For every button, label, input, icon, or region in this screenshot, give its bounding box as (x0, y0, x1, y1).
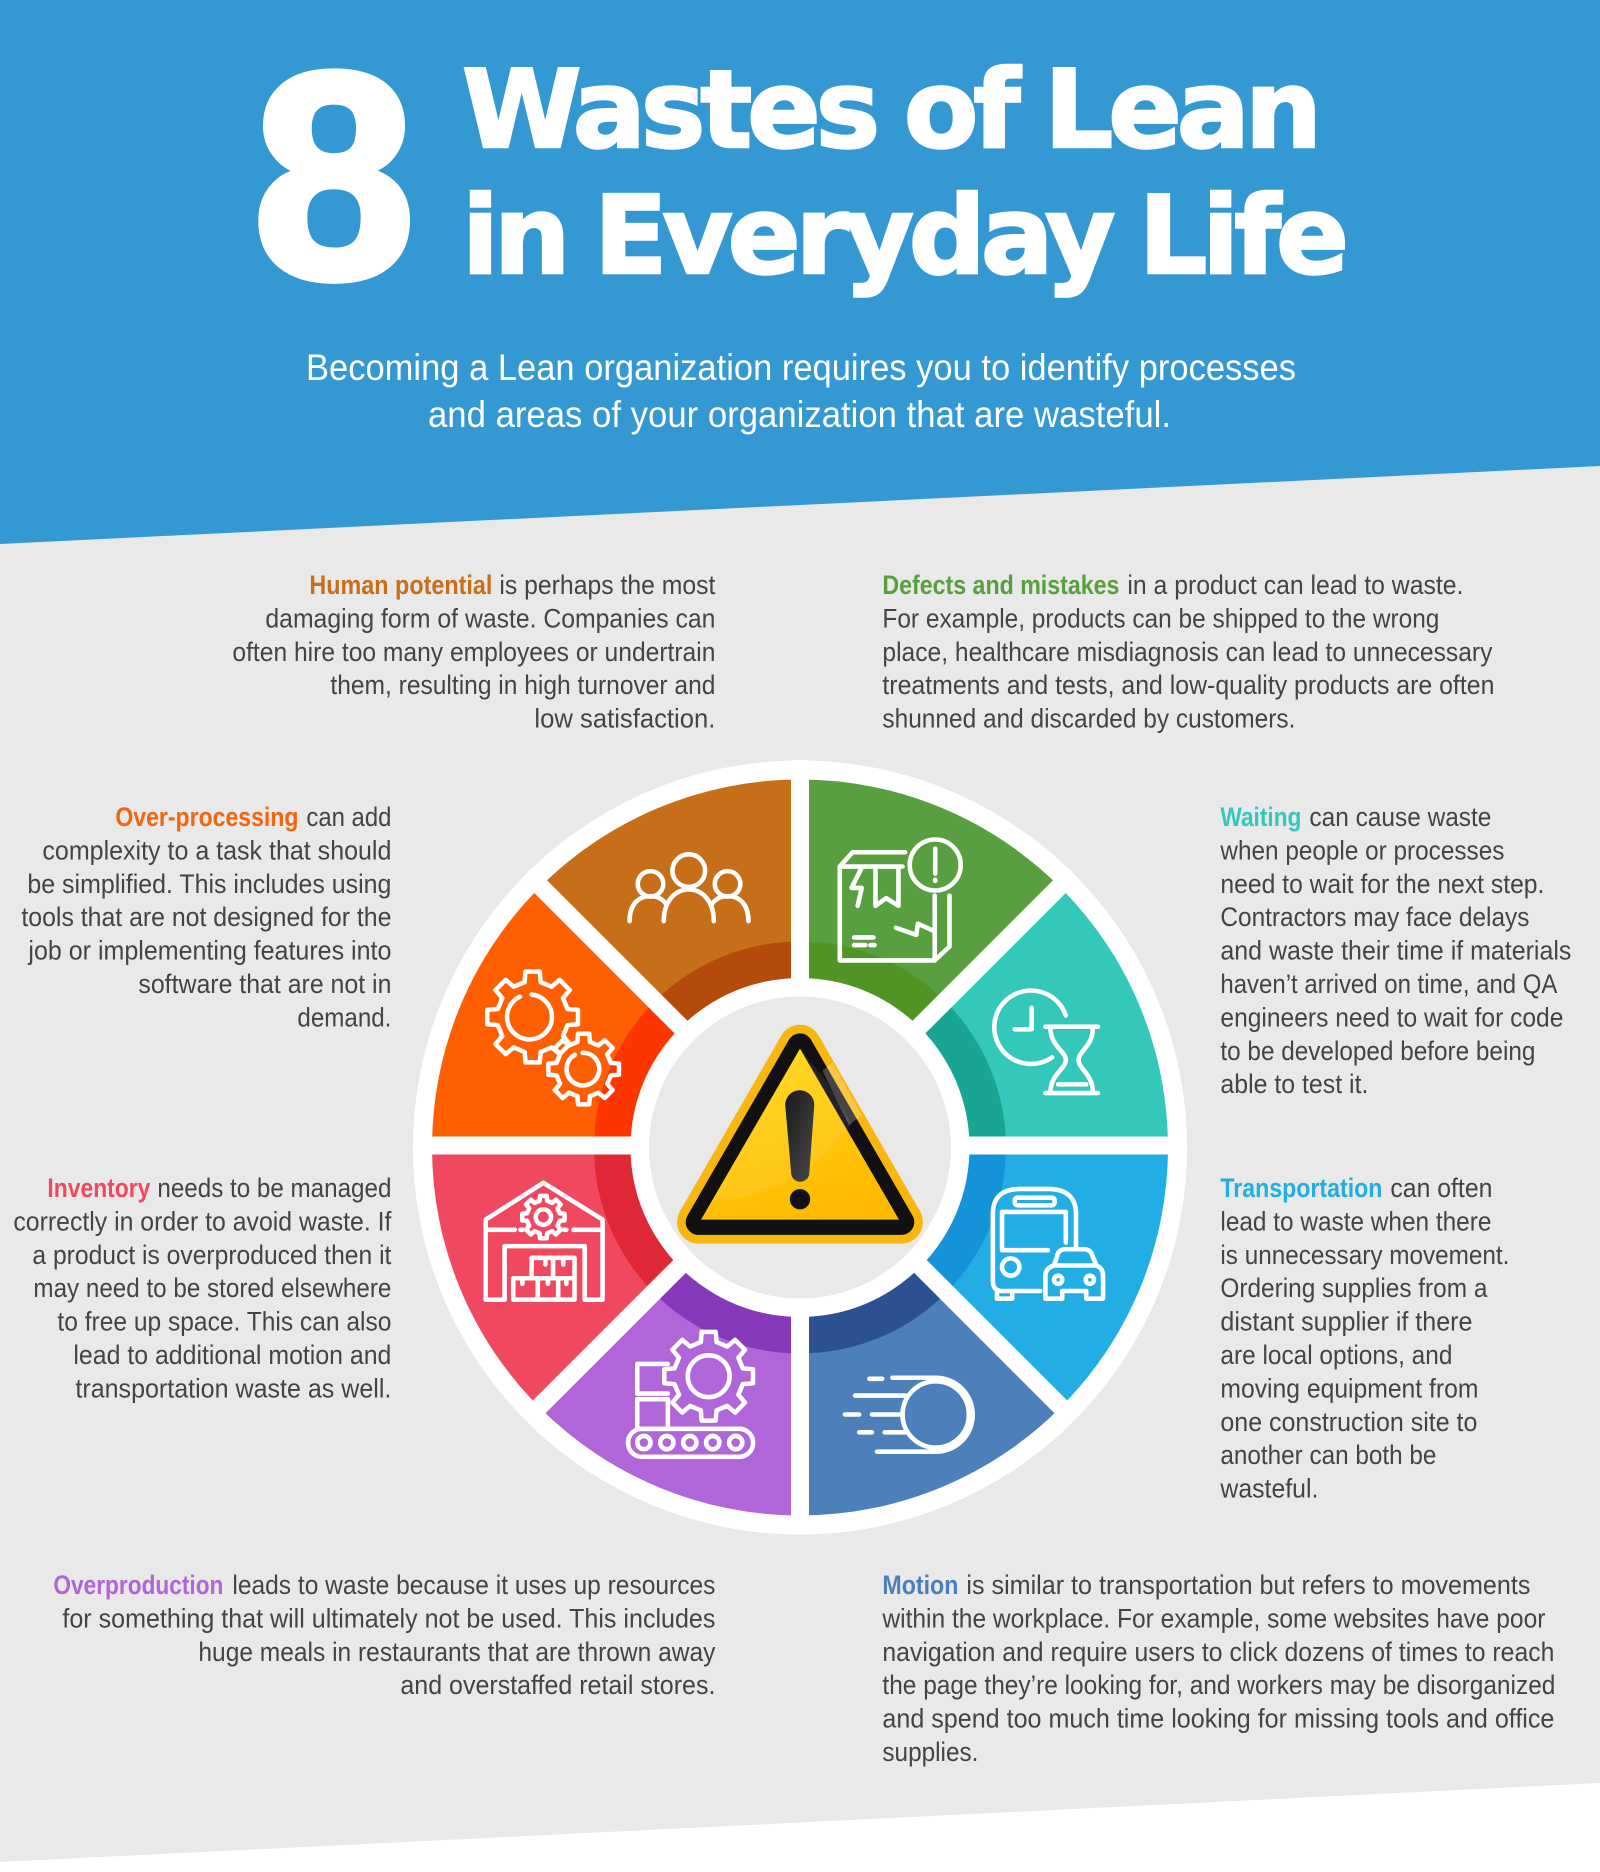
text: human potential: low satisfaction. (534, 704, 715, 734)
icon: damaged box (840, 839, 961, 960)
text: defects and mistakes: For example, products can be shipped to the wrong (882, 603, 1439, 633)
text: waiting: to be developed before being (1220, 1036, 1535, 1066)
text: transportation: is unnecessary movement. (1220, 1240, 1509, 1270)
text: defects and mistakes: treatments and tests, and low-quality products are often (882, 670, 1494, 700)
wheel diagram (413, 760, 1187, 1534)
text: over-processing (21, 802, 391, 1032)
title line 1: Wastes of Lean (462, 48, 1317, 173)
wedge: over-processing (432, 887, 800, 1148)
subtitle: and areas of your organization that are wasteful. (428, 394, 1171, 435)
icon: conveyor and gear (628, 1332, 753, 1457)
text: waiting: able to test it. (1220, 1069, 1368, 1099)
text: transportation: moving equipment from (1220, 1373, 1478, 1403)
text: motion: navigation and require users to click dozens of times to reach (882, 1637, 1554, 1667)
text: waiting: need to wait for the next step. (1220, 869, 1544, 899)
text: transportation: can often (1390, 1173, 1492, 1203)
text: overproduction: for something that will ultimately not be used. This includes (62, 1603, 715, 1633)
wedge: inventory (432, 1148, 800, 1408)
text: transportation: Ordering supplies from a (1220, 1273, 1488, 1303)
big number 8: 8 (253, 13, 415, 340)
text: human potential: Human potential (309, 570, 492, 600)
text: inventory: may need to be stored elsewhere (33, 1273, 391, 1303)
text: motion: Motion (882, 1570, 958, 1600)
title line 2: in Everyday Life (462, 174, 1345, 299)
text: transportation: distant supplier if there (1220, 1307, 1472, 1337)
icon: warehouse (486, 1183, 603, 1300)
blue header band (0, 0, 1600, 544)
text: inventory: a product is overproduced then it (32, 1240, 392, 1270)
text: inventory: Inventory (47, 1173, 150, 1203)
text: defects and mistakes: in a product can lead to waste. (1127, 570, 1463, 600)
text: inventory: correctly in order to avoid waste. If (13, 1206, 392, 1236)
wheel outer white disc (413, 760, 1187, 1534)
text: waiting: haven’t arrived on time, and QA (1220, 969, 1557, 999)
text: inventory (13, 1173, 392, 1403)
icon: moving ball (845, 1378, 973, 1452)
text: motion: and spend too much time looking for missing tools and office (882, 1704, 1554, 1734)
text: inventory: lead to additional motion and (73, 1340, 391, 1370)
text: waiting: and waste their time if materials (1220, 936, 1571, 966)
wedge: defects (800, 780, 1060, 1148)
text: defects and mistakes: place, healthcare misdiagnosis can lead to unnecessary (882, 637, 1493, 667)
text: overproduction: Overproduction (53, 1570, 223, 1600)
text: human potential: often hire too many employees or undertrain (232, 637, 715, 667)
text: human potential (232, 570, 716, 734)
text: waiting (1219, 802, 1571, 1099)
text: transportation: lead to waste when there (1220, 1206, 1491, 1236)
text: motion: within the workplace. For example, some websites have poor (881, 1603, 1545, 1633)
text: inventory: to free up space. This can also (57, 1307, 391, 1337)
text: transportation: another can both be (1220, 1440, 1436, 1470)
wedge: motion (800, 1148, 1060, 1516)
text: defects and mistakes (882, 570, 1494, 734)
text: overproduction: huge meals in restaurants that are thrown away (198, 1637, 716, 1667)
grey centre disc (649, 996, 951, 1298)
text: over-processing: complexity to a task that should (42, 835, 391, 865)
text: inventory: transportation waste as well. (75, 1373, 391, 1403)
wedge: transportation (800, 1148, 1168, 1408)
text: transportation: Transportation (1220, 1173, 1382, 1203)
subtitle: Becoming a Lean organization requires you to identify processes (306, 347, 1296, 388)
text: motion: supplies. (882, 1737, 978, 1767)
text: over-processing: demand. (297, 1002, 391, 1032)
text: over-processing: job or implementing features into (27, 936, 391, 966)
text: human potential: damaging form of waste. Companies can (265, 603, 715, 633)
text: overproduction (53, 1570, 716, 1700)
subtitle (306, 347, 1296, 435)
icon: people (630, 854, 748, 921)
text: transportation: one construction site to (1220, 1407, 1477, 1437)
text: inventory: needs to be managed (157, 1173, 391, 1203)
wedge: overproduction (540, 1148, 800, 1516)
text: transportation: are local options, and (1220, 1340, 1452, 1370)
text: waiting: engineers need to wait for code (1220, 1002, 1563, 1032)
text: overproduction: leads to waste because it uses up resources (232, 1570, 715, 1600)
text: human potential: is perhaps the most (499, 570, 716, 600)
text: defects and mistakes: shunned and discarded by customers. (882, 704, 1295, 734)
white inner ring (630, 978, 970, 1317)
title (253, 13, 1345, 340)
icon: gears (487, 972, 619, 1104)
text: waiting: Waiting (1220, 802, 1301, 832)
text: waiting: Contractors may face delays (1220, 902, 1529, 932)
text: waiting: can cause waste (1309, 802, 1491, 832)
text: human potential: them, resulting in high turnover and (330, 670, 715, 700)
text: motion: is similar to transportation but refers to movements (966, 1570, 1530, 1600)
text: defects and mistakes: Defects and mistakes (882, 570, 1119, 600)
text: over-processing: be simplified. This includes using (27, 869, 391, 899)
text: overproduction: and overstaffed retail stores. (400, 1670, 715, 1700)
text: waiting: when people or processes (1219, 835, 1504, 865)
text: over-processing: software that are not in (138, 969, 391, 999)
text: transportation: wasteful. (1219, 1474, 1318, 1504)
wedge: waiting (800, 887, 1168, 1148)
text: over-processing: can add (306, 802, 391, 832)
text: over-processing: tools that are not designed for the (21, 902, 391, 932)
icon: warning triangle (698, 1046, 902, 1222)
icon: clock and hourglass (994, 990, 1098, 1093)
text: over-processing: Over-processing (115, 802, 298, 832)
text: motion (881, 1570, 1555, 1767)
grey content background (0, 440, 1600, 1862)
icon: bus and car (993, 1189, 1103, 1299)
text: transportation (1219, 1173, 1509, 1504)
wedge: human potential (540, 780, 800, 1148)
